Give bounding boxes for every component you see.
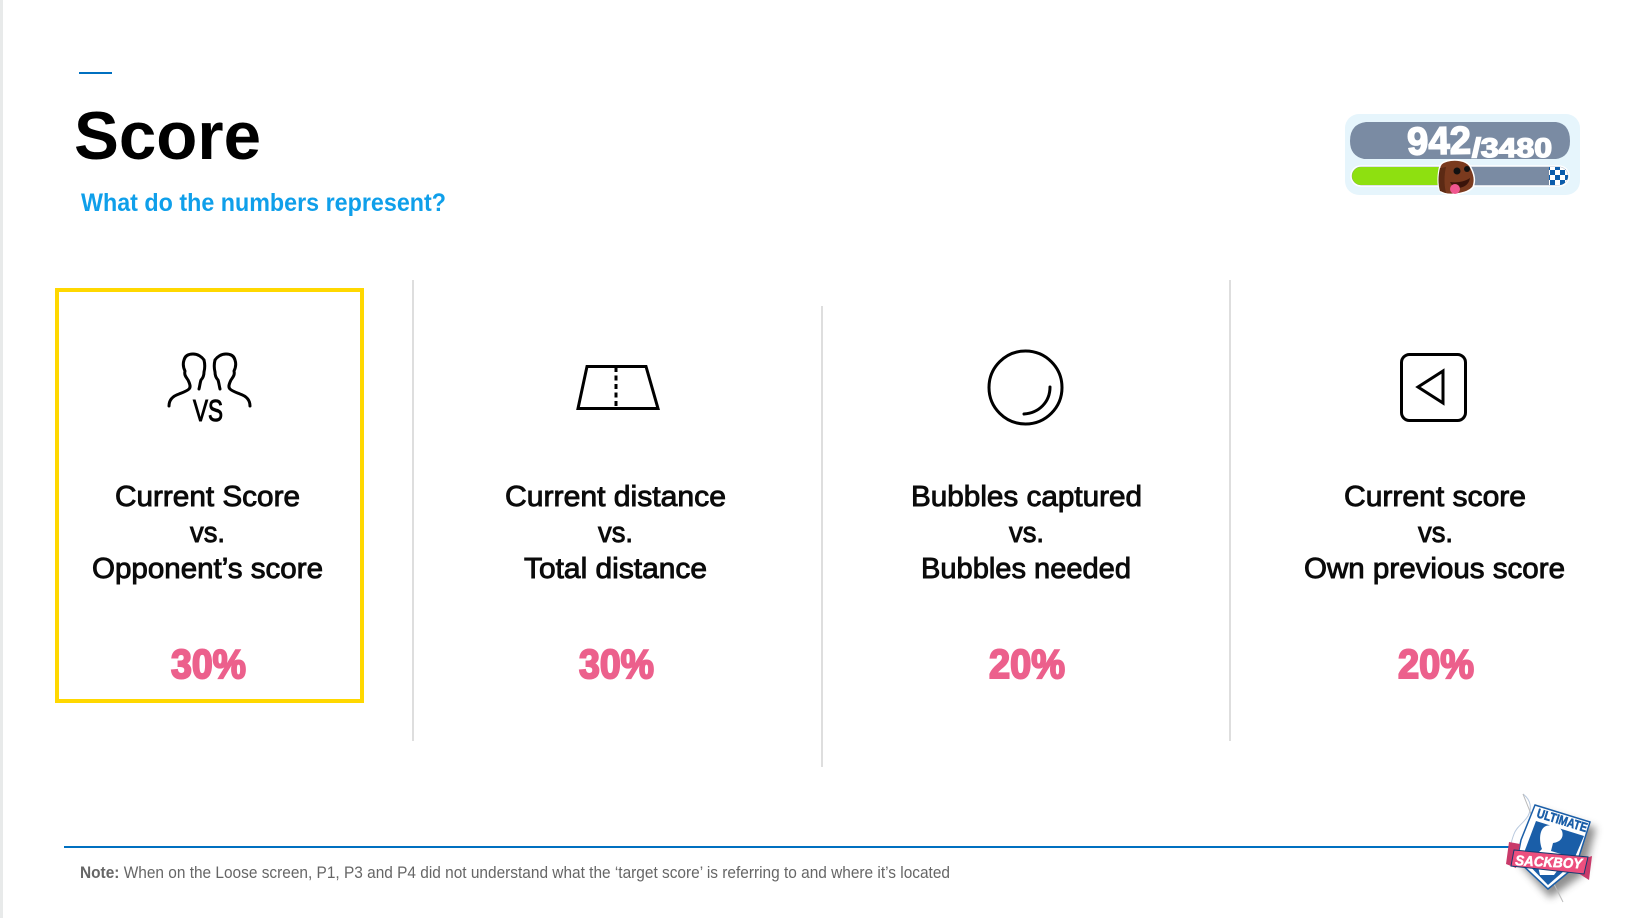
label: vs. (1009, 517, 1044, 549)
badge title: ULTIMATE (1535, 806, 1589, 835)
label: Bubbles captured (911, 481, 1142, 513)
label: vs. (598, 517, 633, 549)
panel: bubbles captured vs needed (911, 351, 1142, 687)
badge character (1536, 825, 1563, 875)
footnote: Note: When on the Loose screen, P1, P3 and P4 did not understand what the ‘target score’ is referring to and where it’s located (80, 864, 950, 882)
percentage: 30% (171, 641, 246, 687)
percentage: 20% (1398, 641, 1474, 687)
label: vs. (190, 517, 225, 549)
panel: current vs total distance (505, 366, 726, 687)
label: Current score (1344, 481, 1526, 513)
subtitle: What do the numbers represent? (81, 189, 446, 217)
label: Own previous score (1304, 553, 1565, 585)
icon: road (578, 366, 658, 408)
icon: bubble (989, 351, 1062, 424)
logo: Ultimate Sackboy badge (1506, 794, 1596, 902)
label: Current Score (115, 481, 300, 513)
panel: current vs opponent score (57, 290, 362, 701)
title accent line (79, 72, 112, 74)
panel: current vs own previous score (1304, 354, 1565, 687)
score bar screenshot (1345, 114, 1580, 195)
title: Score (74, 98, 261, 174)
label (92, 481, 323, 585)
label: vs. (1418, 517, 1453, 549)
label: Bubbles needed (921, 553, 1131, 585)
score numbers: 942 (1407, 119, 1471, 164)
label (505, 481, 726, 585)
icon: two heads vs (169, 354, 250, 428)
icon: sackboy head (1438, 160, 1474, 194)
highlight box (57, 290, 362, 701)
ribbon: SACKBOY (1515, 852, 1584, 872)
score numbers (1407, 119, 1552, 164)
score numbers: /3480 (1472, 133, 1552, 163)
label (911, 481, 1142, 585)
percentage: 30% (579, 641, 654, 687)
icon: back arrow (1402, 354, 1466, 420)
icon: two heads vs: VS (193, 393, 223, 428)
percentage: 20% (989, 641, 1065, 687)
label: Current distance (505, 481, 726, 513)
label: Total distance (524, 553, 707, 585)
label (1304, 481, 1565, 585)
label: Opponent’s score (92, 553, 323, 585)
